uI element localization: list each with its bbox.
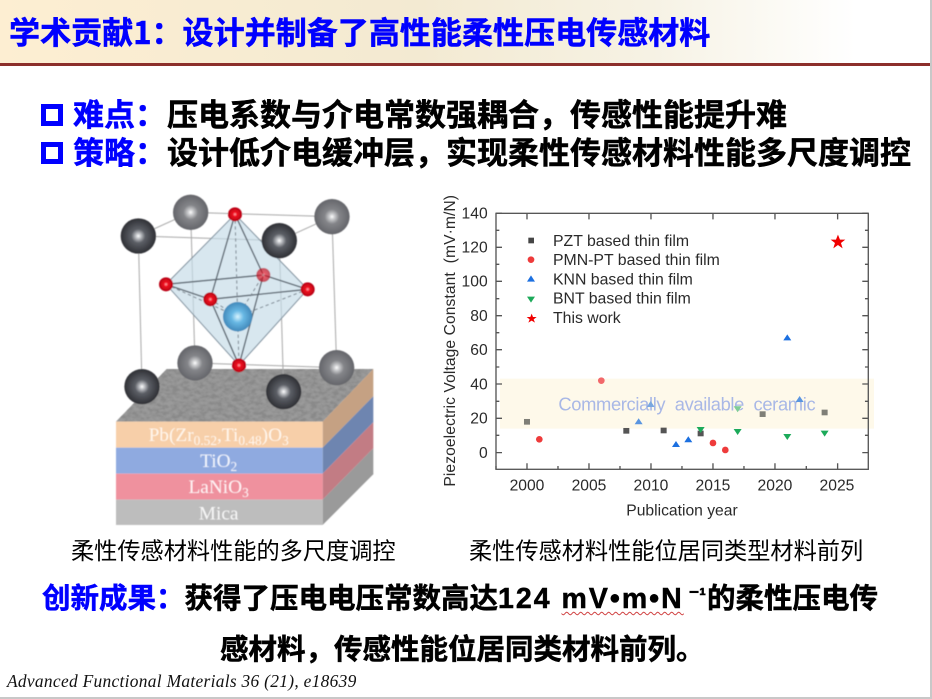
- y tick labels: 0: [479, 445, 488, 462]
- commercial ceramic band: [500, 379, 874, 429]
- layer: PZT: Pb(Zr: [149, 425, 194, 446]
- central atom: [223, 302, 252, 331]
- y tick labels: 100: [462, 273, 488, 290]
- oxygen atoms: [159, 207, 315, 372]
- x tick labels: 2010: [634, 478, 669, 495]
- layer: PZT: )O: [262, 425, 282, 446]
- y tick labels: 80: [470, 308, 488, 325]
- difficulty text: 压电系数与介电常数强耦合，传感性能提升难: [167, 90, 787, 135]
- layer: PZT: 3: [282, 433, 289, 448]
- y tick labels: 40: [470, 376, 488, 393]
- stack right side: [323, 369, 373, 525]
- x tick labels: 2000: [510, 478, 545, 495]
- title: 学术贡献1：设计并制备了高性能柔性压电传感材料: [9, 8, 710, 53]
- PZT points: [524, 410, 828, 436]
- lead atoms: [121, 195, 354, 409]
- checkbox icon: [41, 104, 63, 126]
- octahedron: [166, 214, 308, 365]
- title bar: [0, 0, 930, 66]
- legend: [527, 233, 720, 327]
- page edge: [930, 0, 932, 699]
- layer: PZT: 0.52: [194, 433, 217, 448]
- unit cell edges: [138, 212, 337, 392]
- y tick labels: 20: [470, 411, 488, 428]
- x tick labels: 2015: [696, 478, 731, 495]
- scatter chart: [442, 195, 874, 519]
- result line 2: 感材料，传感性能位居同类材料前列。: [220, 627, 705, 668]
- layer: TiO2: [116, 448, 323, 474]
- y tick labels: 140: [462, 205, 488, 222]
- legend: PZT based thin film: [553, 233, 689, 250]
- legend: PMN-PT based thin film: [553, 252, 720, 269]
- axes frame: [496, 213, 868, 469]
- caption right: 柔性传感材料性能位居同类型材料前列: [469, 538, 863, 564]
- stack top surface: [116, 369, 373, 422]
- figure: perovskite crystal on layered stack: [116, 195, 373, 525]
- result line 1: 创新成果：获得了压电电压常数高达124 mV•m•N⁻¹的柔性压电传: [42, 576, 878, 617]
- x tick labels: [510, 478, 855, 495]
- x axis title: Publication year: [626, 502, 738, 519]
- legend: BNT based thin film: [553, 291, 691, 308]
- caption left: 柔性传感材料性能的多尺度调控: [71, 538, 396, 564]
- bullet: difficulty: [41, 90, 787, 135]
- BNT points: [697, 406, 829, 440]
- legend: This work: [553, 310, 621, 327]
- layer: LaNiO3: LaNiO: [188, 477, 242, 498]
- layer: TiO2: TiO: [200, 451, 231, 472]
- layer: Mica: [116, 500, 323, 525]
- legend: KNN based thin film: [553, 271, 693, 288]
- KNN points: [635, 334, 804, 447]
- x tick labels: 2025: [820, 478, 855, 495]
- layer: LaNiO3: 3: [242, 485, 249, 500]
- layer: PZT: [116, 422, 323, 448]
- this work star: [831, 235, 845, 248]
- title rule: [0, 63, 930, 66]
- x tick labels: 2005: [572, 478, 607, 495]
- layer: PZT: 0.48: [238, 433, 262, 448]
- layer: LaNiO3: [116, 474, 323, 500]
- strategy text: 设计低介电缓冲层，实现柔性传感材料性能多尺度调控: [167, 128, 911, 173]
- bullet: strategy: [41, 128, 911, 173]
- y axis title: Piezoelectric Voltage Constant (mV·m/N): [442, 195, 459, 487]
- checkbox icon: [41, 142, 63, 164]
- layer: Mica: Mica: [199, 503, 239, 524]
- y tick labels: [462, 205, 488, 462]
- y tick labels: 120: [462, 239, 488, 256]
- y tick labels: 60: [470, 342, 488, 359]
- layer: PZT: ,Ti: [217, 425, 238, 446]
- difficulty label: 难点：: [73, 90, 166, 135]
- x tick labels: 2020: [758, 478, 793, 495]
- layer: TiO2: 2: [231, 459, 237, 474]
- strategy label: 策略：: [73, 128, 166, 173]
- PMN-PT points: [536, 377, 729, 453]
- citation: Advanced Functional Materials 36 (21), e18639: [7, 671, 357, 691]
- band label: Commercially available ceramic: [558, 394, 816, 415]
